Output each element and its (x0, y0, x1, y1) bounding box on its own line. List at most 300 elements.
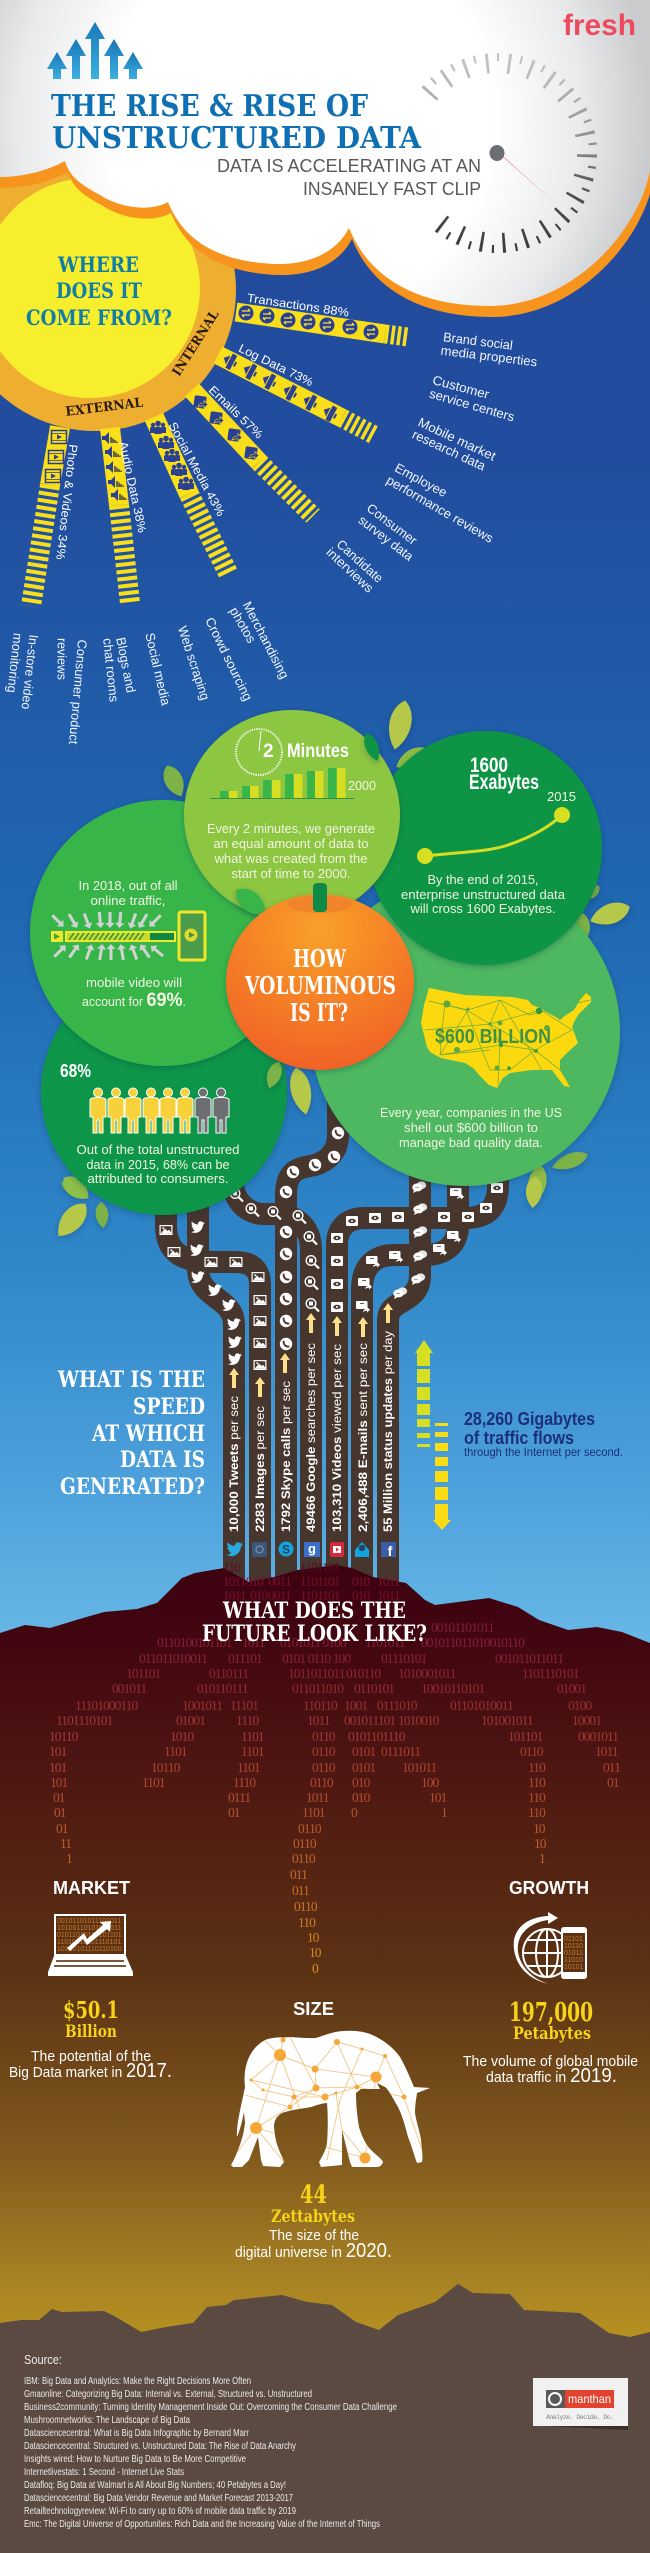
binary roots: 010110 (346, 1666, 381, 1681)
binary roots: 1101101 (300, 1588, 340, 1603)
icon: laptop: 11010110101110101 (57, 1939, 121, 1946)
binary roots: 0110 (292, 1851, 316, 1866)
stat: 68%: 68% (60, 1061, 91, 1081)
icon: instagram (252, 1542, 267, 1557)
panel: 2 minutes (184, 710, 400, 920)
binary roots: 01 (53, 1790, 65, 1805)
internal source labels: Customer (431, 372, 492, 402)
binary roots: 101 (429, 1790, 447, 1805)
external source labels: Crowd sourcing (202, 615, 256, 703)
sun: where does it come from (0, 149, 236, 431)
internal source labels: media properties (440, 343, 539, 369)
ray: transactions: Transactions 88% (246, 291, 350, 320)
strand labels: 49466 Google searches per sec (306, 1343, 318, 1532)
icon: video player and phone (49, 912, 205, 961)
binary roots: 1010001011 (398, 1666, 456, 1681)
sources list: Datasciencecentral: What is Big Data Infographic by Bernard Marr (24, 2428, 250, 2439)
heading: how voluminous is it: IS IT? (290, 998, 348, 1027)
stat: 44 zettabytes: Zettabytes (271, 2207, 355, 2227)
header cloud (0, 0, 650, 317)
ray: log data: Log Data 73% (236, 341, 316, 389)
icons: skype calls (280, 1127, 344, 1350)
binary roots: 0 (351, 1805, 358, 1820)
stat: internet traffic (464, 1409, 623, 1459)
icon: rising arrows (47, 22, 143, 79)
external source labels: Consumer product (66, 639, 90, 745)
arrow: downstream (433, 1423, 451, 1530)
binary roots: 0110 (298, 1821, 322, 1836)
strand labels: 103,310 Videos viewed per sec (332, 1344, 344, 1532)
binary roots: 0111011 (381, 1744, 420, 1759)
binary roots: 01110101 (381, 1651, 427, 1666)
binary roots: 1 (539, 1851, 545, 1866)
binary roots: 0110 (293, 1836, 317, 1851)
logo: manthan: Analyze. Decide. Do. (546, 2414, 614, 2421)
binary roots (49, 1560, 620, 1976)
binary roots: 100 (421, 1775, 440, 1790)
text: attributed to consumers: data in 2015, 68% can be (86, 1157, 230, 1172)
binary roots: 1 (441, 1805, 447, 1820)
binary roots: 0110 (312, 1729, 336, 1744)
text: in 2018 (78, 878, 178, 908)
binary roots: 10 (307, 1930, 320, 1945)
stat: 50.1 billion: Billion (65, 2022, 117, 2042)
binary roots: 0 (312, 1961, 319, 1976)
ray: emails: Emails 57% (206, 383, 266, 442)
binary roots: 110 (528, 1760, 546, 1775)
text: size of digital universe (235, 2227, 392, 2262)
text: every 2 minutes: an equal amount of data to (214, 836, 368, 851)
binary roots: 11 (60, 1836, 71, 1851)
binary roots: 0101011 0100 (280, 1635, 347, 1650)
external source labels: Web scraping (175, 624, 213, 702)
ray: emails (192, 383, 313, 516)
icons: e-mails (356, 1188, 464, 1312)
sources list (24, 2376, 397, 2530)
chart: data growth bars (210, 768, 354, 798)
text: volume of mobile traffic: data traffic in 2019. (486, 2065, 617, 2087)
icon: globe and phone: 11010 (564, 1957, 583, 1964)
up arrows on strands (229, 1303, 393, 1397)
subtitle (217, 155, 481, 199)
logo: manthan (533, 2378, 628, 2430)
binary roots: 0110101 (354, 1681, 394, 1696)
binary roots: 101001011 (481, 1713, 533, 1728)
icon: globe and phone (514, 1912, 587, 1984)
binary roots: 01 (228, 1805, 240, 1820)
external source labels (4, 599, 292, 745)
binary roots: 0111010 (377, 1698, 418, 1713)
external source labels: chat rooms (100, 637, 122, 703)
heading: where does it come from: DOES IT (56, 278, 142, 303)
sources list: Internetlivestats: 1 Second - Internet Live Stats (24, 2467, 184, 2478)
binary roots: 110 (528, 1790, 546, 1805)
internal source labels: research data (410, 427, 489, 474)
icon: skype (278, 1542, 294, 1556)
stat: internet traffic: through the Internet per second. (464, 1445, 623, 1459)
binary roots: 01001 (557, 1681, 586, 1696)
binary roots: 0110100101101 (157, 1635, 232, 1650)
heading: what is the speed: AT WHICH (91, 1421, 205, 1447)
internal source labels: performance reviews (384, 472, 497, 546)
binary roots: 101 (49, 1744, 67, 1759)
ray: transactions (236, 291, 408, 340)
text: enterprise data (401, 872, 566, 916)
binary roots: 10 (309, 1945, 322, 1960)
icons: twitter birds (190, 1221, 242, 1365)
strand labels: 55 Million status updates per day (383, 1331, 395, 1532)
text: bad quality data cost: Every year, companies in the US (380, 1105, 562, 1120)
logo: manthan: manthan (568, 2392, 611, 2406)
sources list: Datasciencecentral: Structured vs. Unstructured Data: The Rise of Data Anarchy (24, 2441, 296, 2452)
heading: what does the future look like (202, 1598, 427, 1647)
heading: what is the speed: SPEED (133, 1394, 205, 1420)
internal source labels (323, 329, 539, 596)
binary roots: 10 (534, 1836, 547, 1851)
strand labels: 10,000 Tweets per sec (229, 1396, 241, 1532)
sources list: Retailtechnologyreview: Wi-Fi to carry up to 60% of mobile data traffic by 2019 (24, 2506, 296, 2517)
text: bad quality data cost: shell out $600 billion to (404, 1120, 538, 1135)
internal source labels: survey data (356, 512, 417, 564)
text: every 2 minutes: start of time to 2000. (232, 866, 350, 881)
external source labels: In-store video (19, 634, 41, 710)
heading: what is the speed (57, 1367, 205, 1500)
text: attributed to consumers (76, 1142, 240, 1186)
text: potential of big data market: The potential of the (31, 2048, 151, 2065)
binary roots: 01001 (176, 1713, 205, 1728)
binary roots: 1011 (242, 1635, 265, 1650)
map: usa (421, 988, 591, 1088)
stat: 44 zettabytes (271, 2180, 355, 2227)
panel: 68 percent consumers (41, 969, 287, 1215)
icon: google (304, 1541, 320, 1557)
icon: clock (236, 729, 282, 775)
binary roots: 1101110101 (56, 1713, 113, 1728)
binary roots: 0101 (352, 1760, 375, 1775)
internal source labels: Candidate (334, 536, 386, 586)
icon: people row (90, 1088, 229, 1133)
external source labels: Merchandising (240, 599, 292, 681)
heading: how voluminous is it: HOW (293, 944, 347, 973)
stat: 1600 exabytes: 1600 (470, 754, 508, 777)
binary roots: 010 (250, 1588, 269, 1603)
binary roots: 1011 (307, 1713, 330, 1728)
binary roots: 011 (292, 1883, 309, 1898)
sources list: Emc: The Digital Universe of Opportunities: Rich Data and the Increasing Value of the Internet of Things (24, 2519, 380, 2530)
binary roots: 1011011011 (288, 1666, 345, 1681)
binary roots: 11101000110 (75, 1698, 138, 1713)
heading: how voluminous is it (244, 944, 396, 1027)
panel: 1600 exabytes (368, 731, 602, 965)
binary roots: 0011 (268, 1588, 291, 1603)
ray: social media (150, 417, 229, 575)
year label: 2000 (348, 778, 376, 793)
binary roots: 1011 (223, 1588, 246, 1603)
heading: where does it come from (26, 252, 172, 330)
binary roots: 1101101 (300, 1560, 340, 1575)
binary roots: 1001011 (182, 1698, 222, 1713)
orange: how voluminous is it (226, 883, 414, 1070)
strand labels: 1792 Skype calls per sec (281, 1381, 293, 1532)
sources heading: Source: (24, 2352, 62, 2367)
stat: 197,000 petabytes (509, 1998, 593, 2044)
internal source labels: service centers (428, 386, 517, 425)
tree canopy panels (30, 710, 620, 1215)
text: in 2018: In 2018, out of all (78, 878, 178, 893)
label: external: EXTERNAL (65, 396, 144, 420)
sources list: Gmaonline: Categorizing Big Data: Internal vs. External, Structured vs. Unstructured (24, 2389, 312, 2400)
binary roots: 011011010 (292, 1681, 344, 1696)
subtitle: DATA IS ACCELERATING AT AN (217, 155, 481, 176)
binary roots: 011 (290, 1867, 307, 1882)
icons: videos (331, 1183, 503, 1312)
icons: status chat bubbles (393, 1181, 427, 1299)
stat: 44 zettabytes: 44 (300, 2180, 327, 2209)
stat: 1600 exabytes: Exabytes (469, 771, 539, 794)
binary roots: 101011 (402, 1760, 436, 1775)
panel: size (231, 1999, 430, 2262)
icon: globe and phone: 10101 (564, 1964, 584, 1971)
title: THE RISE & RISE OF (51, 89, 368, 124)
binary roots: 1011 (377, 1588, 400, 1603)
text: enterprise data: enterprise unstructured data (401, 887, 566, 902)
binary roots: 1101 (302, 1805, 325, 1820)
icon: mail (355, 1542, 369, 1557)
icon: globe and phone: 01011 (564, 1950, 583, 1957)
external source labels: Social media (142, 631, 174, 707)
binary roots: 01 (56, 1821, 68, 1836)
heading: size: SIZE (293, 1999, 334, 2019)
text: bad quality data cost (380, 1105, 562, 1150)
binary roots: 10110 (151, 1760, 181, 1775)
binary roots: 1101101 (300, 1574, 340, 1589)
external source labels: Blogs and (113, 636, 139, 694)
heading: what is the speed: WHAT IS THE (57, 1367, 205, 1393)
binary roots: 10010110101 (421, 1681, 484, 1696)
stat: 2 minutes: 2 (263, 741, 274, 762)
text: in 2018: online traffic, (90, 893, 166, 908)
heading: where does it come from: WHERE (57, 252, 139, 277)
binary roots: 1110 (236, 1713, 259, 1728)
arrow: upstream (415, 1340, 433, 1447)
icon: globe and phone: 01101 (564, 1936, 583, 1943)
binary roots: 001011101 (344, 1713, 395, 1728)
sources list: Datasciencecentral: Big Data Vendor Revenue and Market Forecast 2013-2017 (24, 2493, 293, 2504)
binary roots: 0110 (312, 1744, 336, 1759)
strand labels: 2283 Images per sec (255, 1406, 267, 1532)
icons: images (160, 1225, 266, 1370)
binary roots: 001011011011 (495, 1651, 563, 1666)
sources list: Business2community: Turning Identity Management Inside Out: Overcoming the Consumer Data Challenge (24, 2402, 397, 2413)
binary roots: 1101011 (365, 1635, 405, 1650)
binary roots: 110 (528, 1775, 546, 1790)
binary roots: 00101101011 (431, 1620, 494, 1635)
text: potential of big data market (9, 2048, 172, 2082)
text: enterprise data: will cross 1600 Exabytes. (410, 901, 556, 916)
label: internal: INTERNAL (170, 308, 223, 379)
ray: social media: Social Media 43% (166, 420, 228, 519)
binary roots: 1101 (237, 1760, 260, 1775)
binary roots: 001011011010010110 (421, 1635, 525, 1650)
icon: elephant network (231, 2031, 430, 2167)
strand icons (160, 1127, 503, 1397)
binary roots: 110 (528, 1805, 546, 1820)
ray: photo and videos: Photo & Videos 34% (53, 444, 80, 561)
icon: twitter (227, 1542, 243, 1556)
stat: 50.1 billion (63, 1997, 119, 2042)
stat: 1600 exabytes (469, 754, 539, 794)
binary roots: 0110111 (209, 1666, 248, 1681)
text: volume of mobile traffic: The volume of global mobile (463, 2053, 638, 2070)
leaves behind canopy (51, 698, 633, 1243)
panel: $600 billion (310, 876, 620, 1186)
icon: laptop: 10100110101011011 (57, 1925, 122, 1932)
binary roots: 1101 (142, 1775, 165, 1790)
icon: facebook (381, 1542, 396, 1559)
sources list: Mushroomnetworks: The Landscape of Big Data (24, 2415, 190, 2426)
ray: log data (218, 341, 374, 435)
icon: youtube (330, 1542, 344, 1557)
icon: globe and phone: 10110 (564, 1943, 583, 1950)
internal source labels: Mobile market (416, 414, 499, 464)
binary roots: 01101010011 (450, 1698, 513, 1713)
binary roots: 0001011 (578, 1729, 618, 1744)
leaves on top of canopy (230, 731, 383, 1117)
binary roots: 0110 (312, 1760, 336, 1775)
icon: laptop: 00101101011101011 (57, 1918, 121, 1925)
binary roots: 0110 (520, 1744, 544, 1759)
binary roots: 1101 (241, 1744, 264, 1759)
internal source labels: Brand social (442, 329, 514, 353)
ray: photo and videos (31, 427, 80, 606)
sources list: Insights wired: How to Nurture Big Data to Be More Competitive (24, 2454, 246, 2465)
binary roots: 0101 (352, 1744, 375, 1759)
binary roots: 010 (352, 1574, 371, 1589)
text: mobile video share (82, 975, 186, 1011)
binary roots: 0101101110 (348, 1729, 406, 1744)
binary roots: 1011 (306, 1790, 329, 1805)
binary roots: 110 (223, 1560, 241, 1575)
text: every 2 minutes: what was created from the (213, 851, 368, 866)
panel: mobile video (30, 800, 296, 1066)
icon: facebook: f (388, 1543, 393, 1559)
text: size of digital universe: digital universe in 2020. (235, 2240, 392, 2262)
text: attributed to consumers: attributed to consumers. (88, 1171, 228, 1186)
binary roots: 1011 (377, 1574, 400, 1589)
binary roots: 10001 (572, 1713, 601, 1728)
binary roots: 10110 (49, 1729, 79, 1744)
text: mobile video share: account for 69%. (82, 990, 186, 1011)
binary roots: 011 (603, 1760, 620, 1775)
stat: 2 minutes (263, 741, 349, 762)
binary roots: 1110 (233, 1775, 256, 1790)
binary roots: 001011 (112, 1681, 146, 1696)
text: bad quality data cost: manage bad quality data. (399, 1135, 543, 1150)
internal source labels: interviews (323, 544, 377, 596)
binary roots: 1010010 (398, 1713, 440, 1728)
heading: how voluminous is it: VOLUMINOUS (244, 971, 396, 1000)
footer mountains (0, 2284, 650, 2553)
binary roots: 0101 0110 100 (282, 1651, 351, 1666)
text: mobile video share: mobile video will (86, 975, 182, 990)
binary roots: 10 (533, 1821, 546, 1836)
icon: laptop (48, 1915, 133, 1976)
binary roots: 0100 (568, 1698, 592, 1713)
binary roots: 101101 (126, 1666, 160, 1681)
brand icons at strand base (227, 1541, 396, 1559)
internal source labels: Consumer (364, 500, 421, 548)
stat: 2 minutes: Minutes (287, 741, 349, 762)
binary roots: 011101 (228, 1651, 262, 1666)
binary roots: 1 (66, 1851, 72, 1866)
map label: $600 BILLION (435, 1026, 551, 1048)
heading: where does it come from: COME FROM? (26, 305, 172, 330)
sources list: IBM: Big Data and Analytics: Make the Right Decisions More Often (24, 2376, 251, 2387)
binary roots: 0110 (310, 1775, 334, 1790)
binary roots: 1010 (170, 1729, 194, 1744)
binary roots: 01 (607, 1775, 619, 1790)
title: UNSTRUCTURED DATA (52, 121, 422, 156)
stat: internet traffic: 28,260 Gigabytes (464, 1409, 595, 1429)
chart: growth curve (417, 807, 570, 864)
binary roots: 1011010 (223, 1574, 264, 1589)
icon: skype: S (282, 1542, 290, 1556)
heading: what is the speed: GENERATED? (60, 1474, 205, 1500)
stat: 50.1 billion: $50.1 (63, 1997, 119, 2024)
text: enterprise data: By the end of 2015, (428, 872, 538, 887)
heading: what does the future look like: WHAT DOES THE (222, 1598, 406, 1624)
binary roots: 11101 (230, 1698, 258, 1713)
binary roots: 011011010011 (139, 1651, 207, 1666)
binary roots: 01 (54, 1805, 66, 1820)
stat: 197,000 petabytes: Petabytes (513, 2024, 591, 2044)
stat: 197,000 petabytes: 197,000 (509, 1998, 593, 2028)
binary roots: 010 (352, 1775, 371, 1790)
binary roots: 0110 (294, 1899, 318, 1914)
strand labels (229, 1331, 395, 1532)
heading: what is the speed: DATA IS (120, 1447, 205, 1473)
binary roots: 010 (352, 1790, 371, 1805)
title (51, 89, 422, 156)
binary roots: 1011 (595, 1744, 618, 1759)
text: attributed to consumers: Out of the total unstructured (76, 1142, 240, 1157)
binary roots: 110 (298, 1915, 316, 1930)
external source labels: reviews (54, 638, 69, 680)
binary roots: 0111 (228, 1790, 250, 1805)
strand labels: 2,406,488 E-mails sent per sec (358, 1343, 370, 1532)
heading: market: MARKET (53, 1878, 130, 1898)
binary roots: 110110 (303, 1698, 338, 1713)
binary roots: 010110111 (197, 1681, 248, 1696)
binary roots: 101101 (508, 1729, 542, 1744)
external source labels: photos (227, 604, 259, 646)
tree trunk: data strands (166, 1100, 498, 1590)
text: every 2 minutes (207, 821, 375, 881)
rays: data sources (31, 291, 408, 606)
external source labels: monitoring (4, 632, 26, 694)
panel: growth (463, 1878, 638, 2087)
ray: audio data: Audio Data 38% (116, 440, 149, 534)
sources list: Datafloq: Big Data at Walmart is All About Big Numbers; 40 Petabytes a Day! (24, 2480, 286, 2491)
binary roots: 1001 (344, 1698, 367, 1713)
icons: searches (230, 1189, 319, 1312)
heading: what does the future look like: FUTURE LOOK LIKE? (202, 1621, 427, 1647)
brand logo: fresh: fresh (563, 9, 636, 42)
ray: audio data (102, 428, 149, 603)
binary roots: 101 (49, 1760, 67, 1775)
text: size of digital universe: The size of the (269, 2227, 359, 2244)
text: potential of big data market: Big Data market in 2017. (9, 2060, 172, 2082)
